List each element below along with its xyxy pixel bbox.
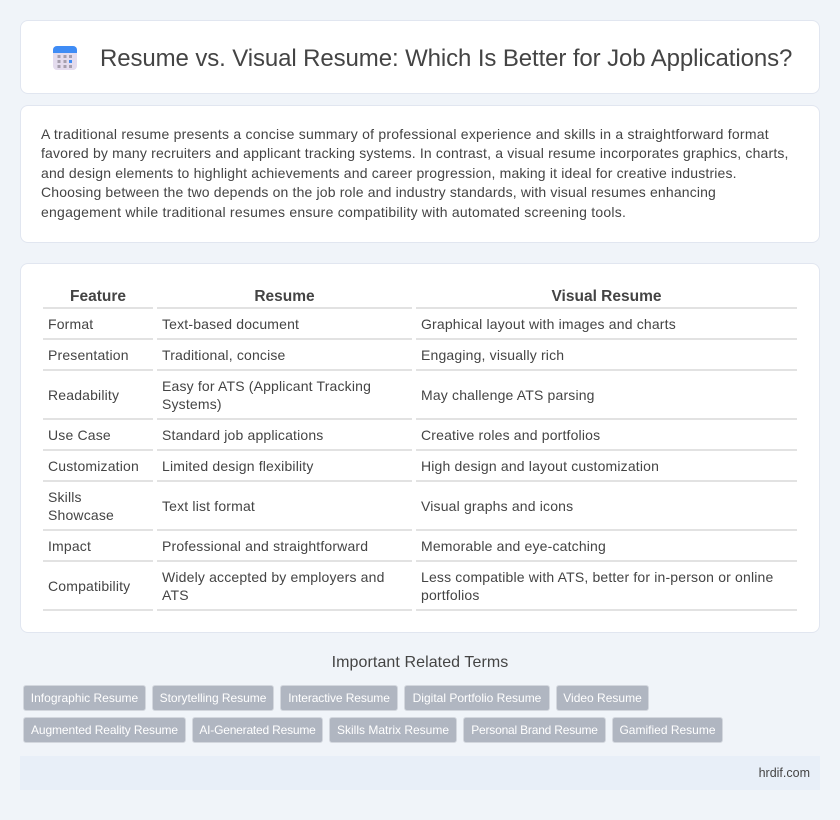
comparison table: High design and layout customization — [421, 458, 659, 474]
comparison table: Limited design flexibility — [162, 458, 314, 474]
comparison table: Format — [48, 316, 93, 332]
comparison table: Traditional, concise — [162, 347, 286, 363]
comparison table: Readability — [48, 387, 119, 403]
panel: comparison table — [20, 263, 820, 633]
comparison table: Use Case — [48, 427, 111, 443]
comparison table: Standard job applications — [162, 427, 323, 443]
intro text: A traditional resume presents a concise summary of professional experience and skills in a straightforward format — [41, 126, 769, 142]
comparison table: Customization — [48, 458, 139, 474]
comparison table: portfolios — [421, 587, 480, 603]
related terms tags: AI-Generated Resume — [199, 723, 316, 737]
footer source: hrdif.com — [759, 766, 810, 780]
related terms tags: Augmented Reality Resume — [31, 723, 178, 737]
comparison table: Systems) — [162, 396, 222, 412]
related terms tags: Digital Portfolio Resume — [413, 691, 541, 705]
comparison table: Less compatible with ATS, better for in-person or online — [421, 569, 773, 585]
comparison table: Easy for ATS (Applicant Tracking — [162, 378, 371, 394]
comparison table: Impact — [48, 538, 91, 554]
table header: resume: Resume — [254, 288, 315, 305]
intro text: Choosing between the two depends on the job role and industry standards, with visual resumes enhancing — [41, 184, 716, 200]
comparison table — [43, 288, 797, 611]
related terms tags: Video Resume — [563, 691, 642, 705]
footer bar — [20, 756, 820, 790]
panel: introduction — [20, 105, 820, 243]
comparison table: Text list format — [162, 498, 255, 514]
icon: calendar — [53, 46, 77, 70]
comparison table: Showcase — [48, 507, 114, 523]
comparison table: Compatibility — [48, 578, 130, 594]
comparison table: Text-based document — [162, 316, 299, 332]
intro text — [41, 126, 789, 220]
comparison table: Professional and straightforward — [162, 538, 368, 554]
intro text: and design elements to highlight achievements and career progression, making it ideal for creative industries. — [41, 165, 737, 181]
comparison table: Engaging, visually rich — [421, 347, 564, 363]
related terms tags: Storytelling Resume — [160, 691, 266, 705]
title: Resume vs. Visual Resume: Which Is Better for Job Applications? — [100, 45, 792, 72]
comparison table: Skills — [48, 489, 82, 505]
related terms tags: Skills Matrix Resume — [337, 723, 449, 737]
comparison table: Memorable and eye-catching — [421, 538, 606, 554]
comparison table: Visual graphs and icons — [421, 498, 573, 514]
related terms heading: Important Related Terms — [332, 654, 508, 671]
related terms tags: Gamified Resume — [619, 723, 716, 737]
related terms tags: Personal Brand Resume — [471, 723, 598, 737]
comparison table: Graphical layout with images and charts — [421, 316, 676, 332]
table header: visual resume: Visual Resume — [552, 288, 662, 305]
comparison table: Creative roles and portfolios — [421, 427, 600, 443]
comparison table: Presentation — [48, 347, 129, 363]
comparison table: ATS — [162, 587, 189, 603]
comparison table: Widely accepted by employers and — [162, 569, 385, 585]
table header: feature: Feature — [70, 288, 126, 305]
header panel — [20, 20, 820, 94]
related terms tags: Infographic Resume — [31, 691, 138, 705]
related terms tags: Interactive Resume — [288, 691, 390, 705]
intro text: favored by many recruiters and applicant tracking systems. In contrast, a visual resume incorporates graphics, charts, — [41, 145, 789, 161]
intro text: engagement while traditional resumes ensure compatibility with automated screening tools. — [41, 204, 626, 220]
comparison table: May challenge ATS parsing — [421, 387, 595, 403]
